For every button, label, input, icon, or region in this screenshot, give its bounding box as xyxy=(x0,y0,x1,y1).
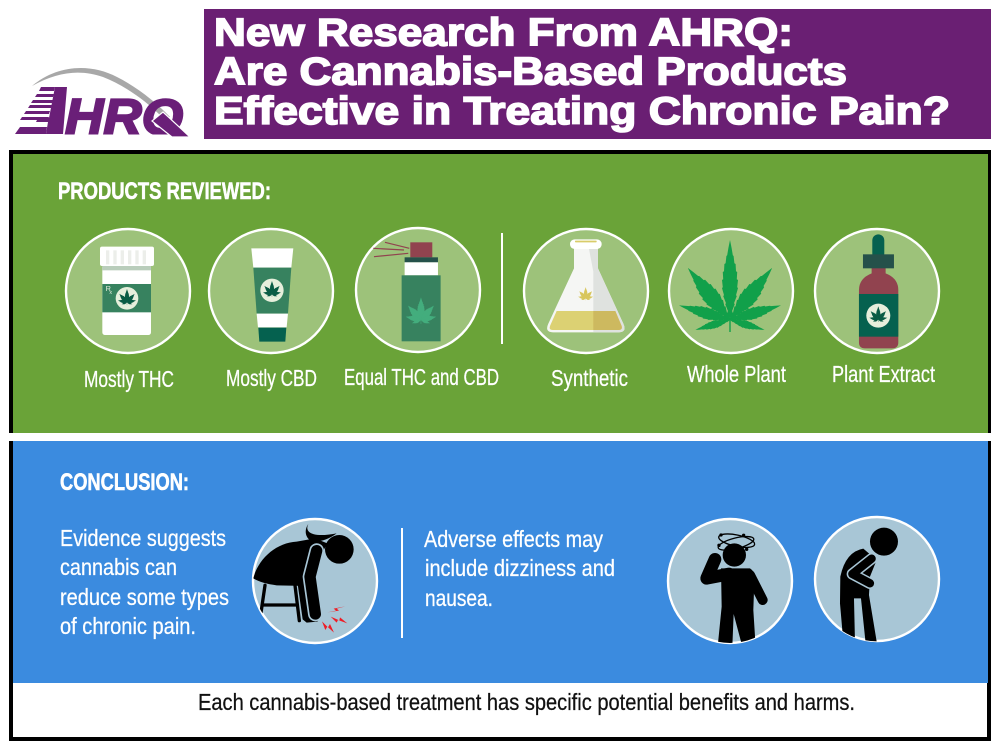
logo letters HRQ: HRQ xyxy=(65,89,183,145)
text: adverse effects: nausea. xyxy=(425,585,493,611)
product: whole plant xyxy=(669,229,793,387)
icon: cannabis leaf xyxy=(669,229,793,353)
AHRQ logo xyxy=(15,68,188,136)
icon: dizzy person xyxy=(668,519,792,647)
icon: person with knee pain xyxy=(253,519,377,643)
text: evidence: reduce some types xyxy=(60,584,229,610)
label: equal THC and CBD: Equal THC and CBD xyxy=(344,364,499,390)
icon: tube xyxy=(209,229,333,353)
heading: products reviewed: PRODUCTS REVIEWED: xyxy=(58,178,271,205)
logo arc xyxy=(32,68,170,117)
product: plant extract xyxy=(815,229,939,387)
label: mostly CBD: Mostly CBD xyxy=(226,365,317,391)
text: evidence: of chronic pain. xyxy=(60,613,196,639)
title text: Are Cannabis-Based Products xyxy=(214,50,847,94)
product: synthetic xyxy=(524,229,648,391)
product: mostly CBD xyxy=(209,229,333,391)
icon: flask xyxy=(524,229,648,353)
panel: conclusion xyxy=(13,441,988,683)
text: adverse effects: Adverse effects may xyxy=(424,526,603,552)
footer note: Each cannabis-based treatment has specific potential benefits and harms. xyxy=(198,689,855,715)
text: adverse effects xyxy=(424,526,615,611)
title text: Effective in Treating Chronic Pain? xyxy=(214,90,950,133)
text: evidence: cannabis can xyxy=(60,554,177,580)
logo letter A xyxy=(15,87,67,134)
outer black frame xyxy=(11,152,989,739)
logo Q tail xyxy=(152,112,190,137)
label: synthetic: Synthetic xyxy=(551,365,628,391)
icon: pill bottle: R xyxy=(106,284,111,293)
heading: conclusion: CONCLUSION: xyxy=(60,469,189,496)
product: equal THC and CBD xyxy=(344,228,499,390)
icon: dropper bottle xyxy=(815,229,939,353)
product: mostly THC xyxy=(66,229,190,392)
icon: pill bottle: x xyxy=(109,290,112,296)
title text: New Research From AHRQ: xyxy=(214,12,793,54)
text: adverse effects: include dizziness and xyxy=(425,555,615,581)
label: mostly THC: Mostly THC xyxy=(84,366,174,392)
icon: nauseous person xyxy=(815,517,939,643)
title banner xyxy=(204,9,991,139)
white gap between panels xyxy=(0,433,1000,441)
icon: spray can xyxy=(356,228,480,352)
text: evidence xyxy=(60,525,229,639)
text: evidence: Evidence suggests xyxy=(60,525,226,551)
icon: pill bottle xyxy=(66,229,190,353)
title text xyxy=(214,12,950,133)
panel: products reviewed xyxy=(13,154,988,433)
label: whole plant: Whole Plant xyxy=(687,361,786,387)
label: plant extract: Plant Extract xyxy=(832,361,935,387)
